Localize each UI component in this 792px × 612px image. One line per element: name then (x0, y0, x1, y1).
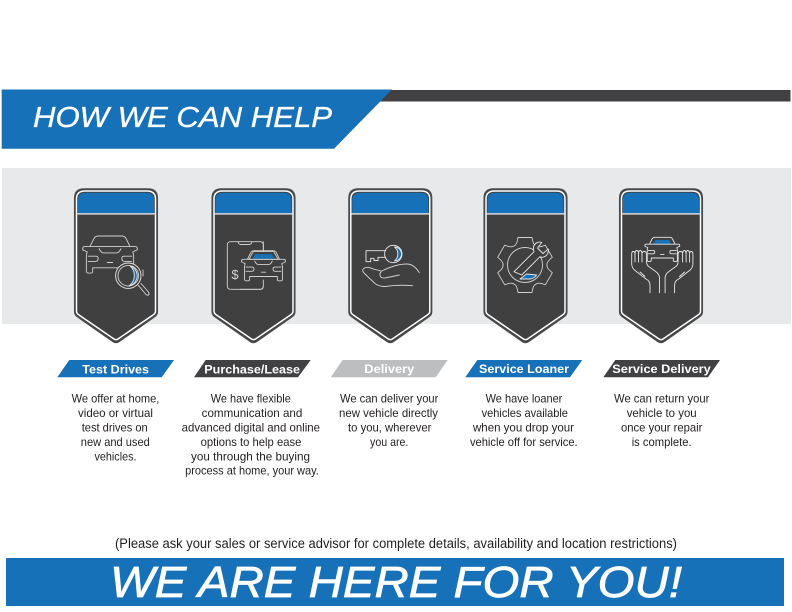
text block: purchase/lease description: advanced digital and online (182, 420, 320, 434)
icon: key above open hand (363, 245, 419, 286)
text block: test drives description: vehicles. (94, 449, 136, 463)
text block: delivery description: you are. (370, 435, 408, 449)
text block: test drives description (72, 392, 159, 463)
text block: purchase/lease description: communication and (202, 406, 302, 420)
panel: service loaner badge (484, 189, 567, 342)
label: test drives: Test Drives (82, 364, 149, 376)
text block: service delivery description: vehicle to you (627, 406, 697, 420)
icon: gear with wrench (496, 238, 554, 292)
footer banner (6, 558, 784, 607)
text block: purchase/lease description: options to help ease (201, 435, 302, 449)
panel: test drives badge (75, 189, 157, 342)
label: service loaner (465, 360, 582, 377)
icon: phone with car and dollar sign: $ (231, 267, 239, 282)
label: test drives (57, 360, 174, 377)
header banner (2, 90, 790, 149)
icon: car with magnifying glass (83, 236, 149, 295)
text block: test drives description: test drives on (82, 420, 148, 434)
disclaimer note: (Please ask your sales or service advisor for complete details, availability and location restrictions) (115, 536, 677, 551)
text block: purchase/lease description: process at home, your way. (185, 464, 319, 478)
text block: service delivery description: We can return your (614, 392, 709, 406)
text block: service loaner description: when you drop your (472, 420, 574, 434)
label: delivery (331, 360, 448, 377)
grey background band (2, 168, 791, 324)
icon: two hands holding a car (632, 237, 693, 293)
text block: purchase/lease description: you through the buying (191, 449, 310, 463)
text block: service loaner description: We have loaner (486, 392, 562, 406)
label: service delivery: Service Delivery (612, 364, 711, 376)
text block: test drives description: video or virtual (78, 406, 153, 420)
text block: purchase/lease description (182, 392, 320, 478)
panel: delivery badge (349, 189, 432, 342)
text block: service delivery description (614, 392, 709, 449)
text block: test drives description: new and used (81, 435, 150, 449)
text block: test drives description: We offer at home, (72, 392, 159, 406)
text block: service loaner description: vehicle off for service. (470, 435, 578, 449)
text block: service loaner description: vehicles available (482, 406, 568, 420)
label: purchase/lease (194, 360, 311, 377)
panel: service delivery badge (620, 189, 702, 342)
label: delivery: Delivery (364, 364, 415, 376)
text block: service delivery description: is complete. (632, 435, 692, 449)
icon: phone with car and dollar sign (227, 242, 285, 289)
text block: service delivery description: once your repair (621, 420, 702, 434)
label: service loaner: Service Loaner (479, 364, 570, 376)
text block: delivery description: new vehicle directly (339, 406, 438, 420)
text block: delivery description: We can deliver your (340, 392, 438, 406)
label: service delivery (603, 360, 720, 377)
text block: purchase/lease description: We have flexible (211, 392, 291, 406)
header banner: HOW WE CAN HELP (33, 102, 333, 134)
panel: purchase/lease badge (212, 189, 295, 342)
text block: delivery description: to you, wherever (348, 420, 431, 434)
text block: delivery description (339, 392, 438, 449)
label: purchase/lease: Purchase/Lease (204, 364, 300, 376)
footer banner: WE ARE HERE FOR YOU! (110, 558, 682, 607)
text block: service loaner description (470, 392, 578, 449)
